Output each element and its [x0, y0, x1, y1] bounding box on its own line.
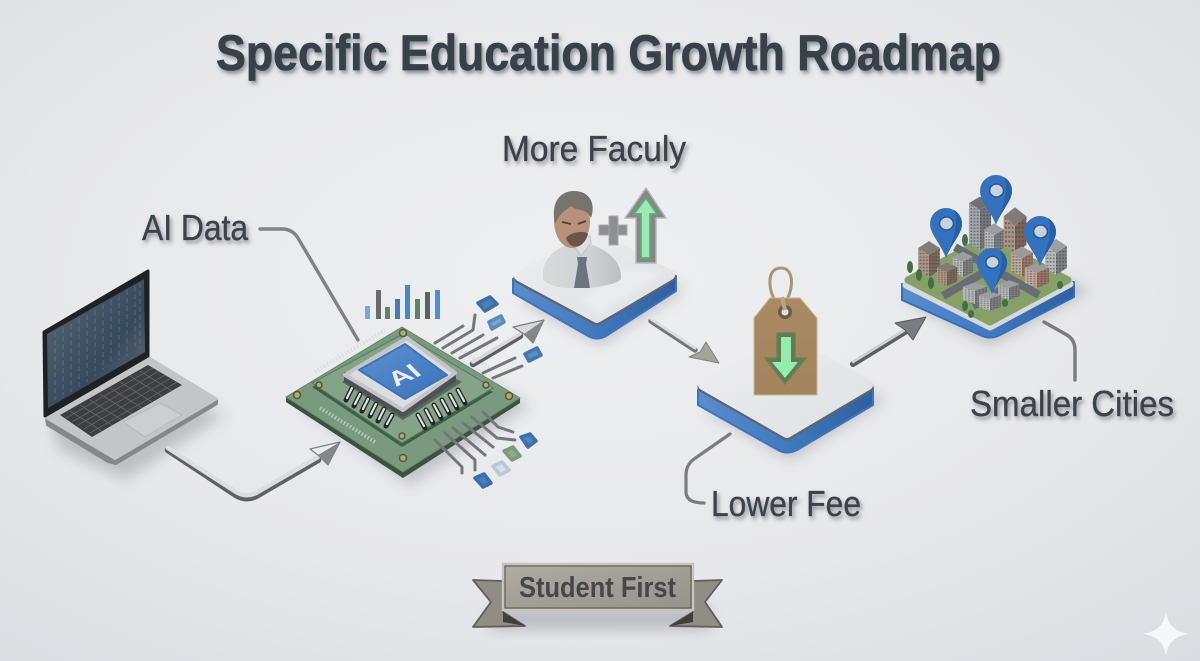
- pcb: [286, 397, 520, 478]
- chip label: AI: [381, 360, 427, 391]
- arrow: fee to cities: [853, 317, 926, 364]
- arrow: faculty to fee: [651, 319, 719, 363]
- leader: Lower Fee: [686, 434, 730, 503]
- banner: Student First: [473, 564, 722, 630]
- pins: [980, 175, 1012, 225]
- icon: AI chip on circuit board: [286, 285, 541, 487]
- platform: lower fee: [698, 340, 885, 460]
- title: Specific Education Growth Roadmap: [216, 25, 1001, 81]
- buildings: [969, 197, 991, 250]
- icon: small city with map pins: [902, 175, 1090, 345]
- components: [475, 297, 541, 487]
- arrow: laptop to chip: [168, 442, 340, 498]
- chip body: [345, 373, 455, 416]
- label: More Faculy: More Faculy: [502, 128, 686, 169]
- platform: more faculty: [513, 235, 685, 345]
- label: Lower Fee: Lower Fee: [711, 483, 861, 524]
- icon: sparkle watermark: [1143, 611, 1189, 656]
- icon: laptop: [44, 271, 225, 480]
- pins: [346, 388, 465, 428]
- label: AI Data: AI Data: [142, 207, 249, 248]
- leader: Smaller Cities: [1044, 322, 1075, 380]
- mini bar chart: [365, 285, 440, 319]
- icon: faculty member bust: [543, 191, 621, 288]
- label: Smaller Cities: Smaller Cities: [970, 383, 1174, 424]
- leader: AI Data: [260, 229, 358, 340]
- trees: [907, 234, 1063, 318]
- banner text: Student First: [519, 572, 676, 604]
- traces: [435, 315, 522, 473]
- icon: plus sign: [599, 216, 627, 245]
- roads: [943, 247, 1039, 306]
- chip shadow: [342, 350, 462, 420]
- icon: price tag with down arrow: [754, 268, 817, 395]
- arrow: chip to faculty: [473, 320, 544, 364]
- icon: green up arrow: [625, 188, 666, 263]
